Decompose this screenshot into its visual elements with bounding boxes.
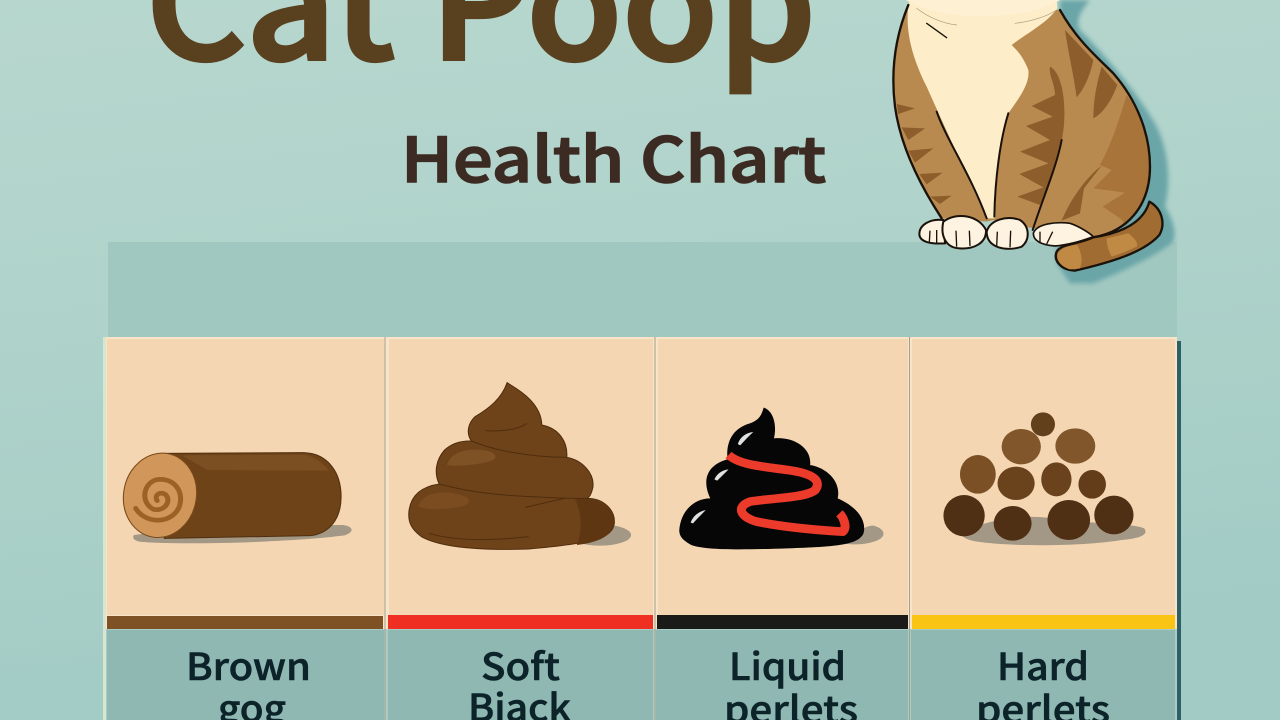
label background: [656, 630, 908, 720]
icon: black stool with red streak: [679, 408, 884, 549]
toe lines: [929, 230, 1053, 247]
panel frame: [103, 337, 1177, 720]
label background: [388, 630, 653, 720]
tail stripes: [1058, 233, 1137, 269]
left highlight edge: [103, 337, 106, 720]
label background: [911, 630, 1175, 720]
header band behind the chart: [108, 242, 1177, 337]
lower highlight: [418, 492, 469, 509]
creases: [429, 423, 587, 540]
darker flank: [1093, 95, 1149, 226]
label: Brown gog: Brown: [186, 637, 311, 691]
cat outlines: [893, 5, 1150, 237]
cell background: [389, 339, 653, 615]
column: hard pellets: [911, 339, 1175, 720]
chin: [906, 0, 1060, 16]
subtitle: Health Chart: Health Chart: [401, 110, 826, 200]
label row base: [103, 629, 1177, 720]
colour strip: [107, 616, 383, 629]
shadow: [569, 524, 631, 546]
icon: log: [118, 449, 352, 543]
cell background: [107, 339, 384, 615]
gloss highlights: [691, 432, 753, 523]
far left paw: [919, 220, 945, 244]
cat drop shadow: [1057, 0, 1175, 283]
column dividers: [384, 337, 910, 720]
right front paw: [987, 218, 1028, 249]
label: Brown gog: [186, 637, 311, 720]
haunch wedge: [1062, 166, 1102, 221]
panel shadow edge: [1176, 341, 1181, 720]
log body: [161, 453, 341, 538]
shadow: [133, 525, 352, 543]
label: Liquid perlets: [724, 637, 858, 720]
highlight: [447, 450, 496, 466]
icon: soft stool: [409, 383, 631, 549]
black body: [679, 408, 864, 549]
label background: [107, 630, 384, 720]
colour strip: [388, 615, 653, 629]
column: liquid pellets: [656, 339, 908, 720]
colour strip: [912, 615, 1175, 629]
cream chest: [908, 0, 1057, 218]
shadow: [843, 526, 884, 544]
label: Liquid perlets: Liquid: [729, 637, 846, 691]
pellets: [943, 412, 1134, 541]
chart panel: [103, 337, 1181, 720]
right shade: [575, 499, 614, 545]
label: Soft Biack: Soft: [481, 637, 560, 691]
shadow: [960, 517, 1146, 545]
far right paw: [1033, 223, 1093, 246]
cell background: [912, 339, 1175, 615]
column: soft black: [388, 339, 653, 720]
cat tail: [1056, 202, 1162, 271]
icon: hard pellets pile: [943, 412, 1146, 545]
label: Hard perlets: Hard: [997, 637, 1089, 691]
left front paw: [942, 216, 986, 248]
spiral rings: [136, 479, 181, 520]
highlight: [182, 455, 329, 471]
cat paws: [919, 216, 1093, 249]
stool silhouette: [409, 383, 614, 549]
colour strip: [657, 615, 908, 629]
cat body: [893, 5, 1150, 237]
red streak: [729, 455, 845, 532]
log end: [118, 449, 202, 542]
column: brown log: [107, 339, 384, 720]
label: Hard perlets: [976, 637, 1110, 720]
cell background: [658, 339, 908, 615]
illustration: sitting tabby cat: [893, 0, 1175, 283]
label: Soft Biack: [468, 637, 571, 720]
tabby stripes: [897, 30, 1117, 205]
